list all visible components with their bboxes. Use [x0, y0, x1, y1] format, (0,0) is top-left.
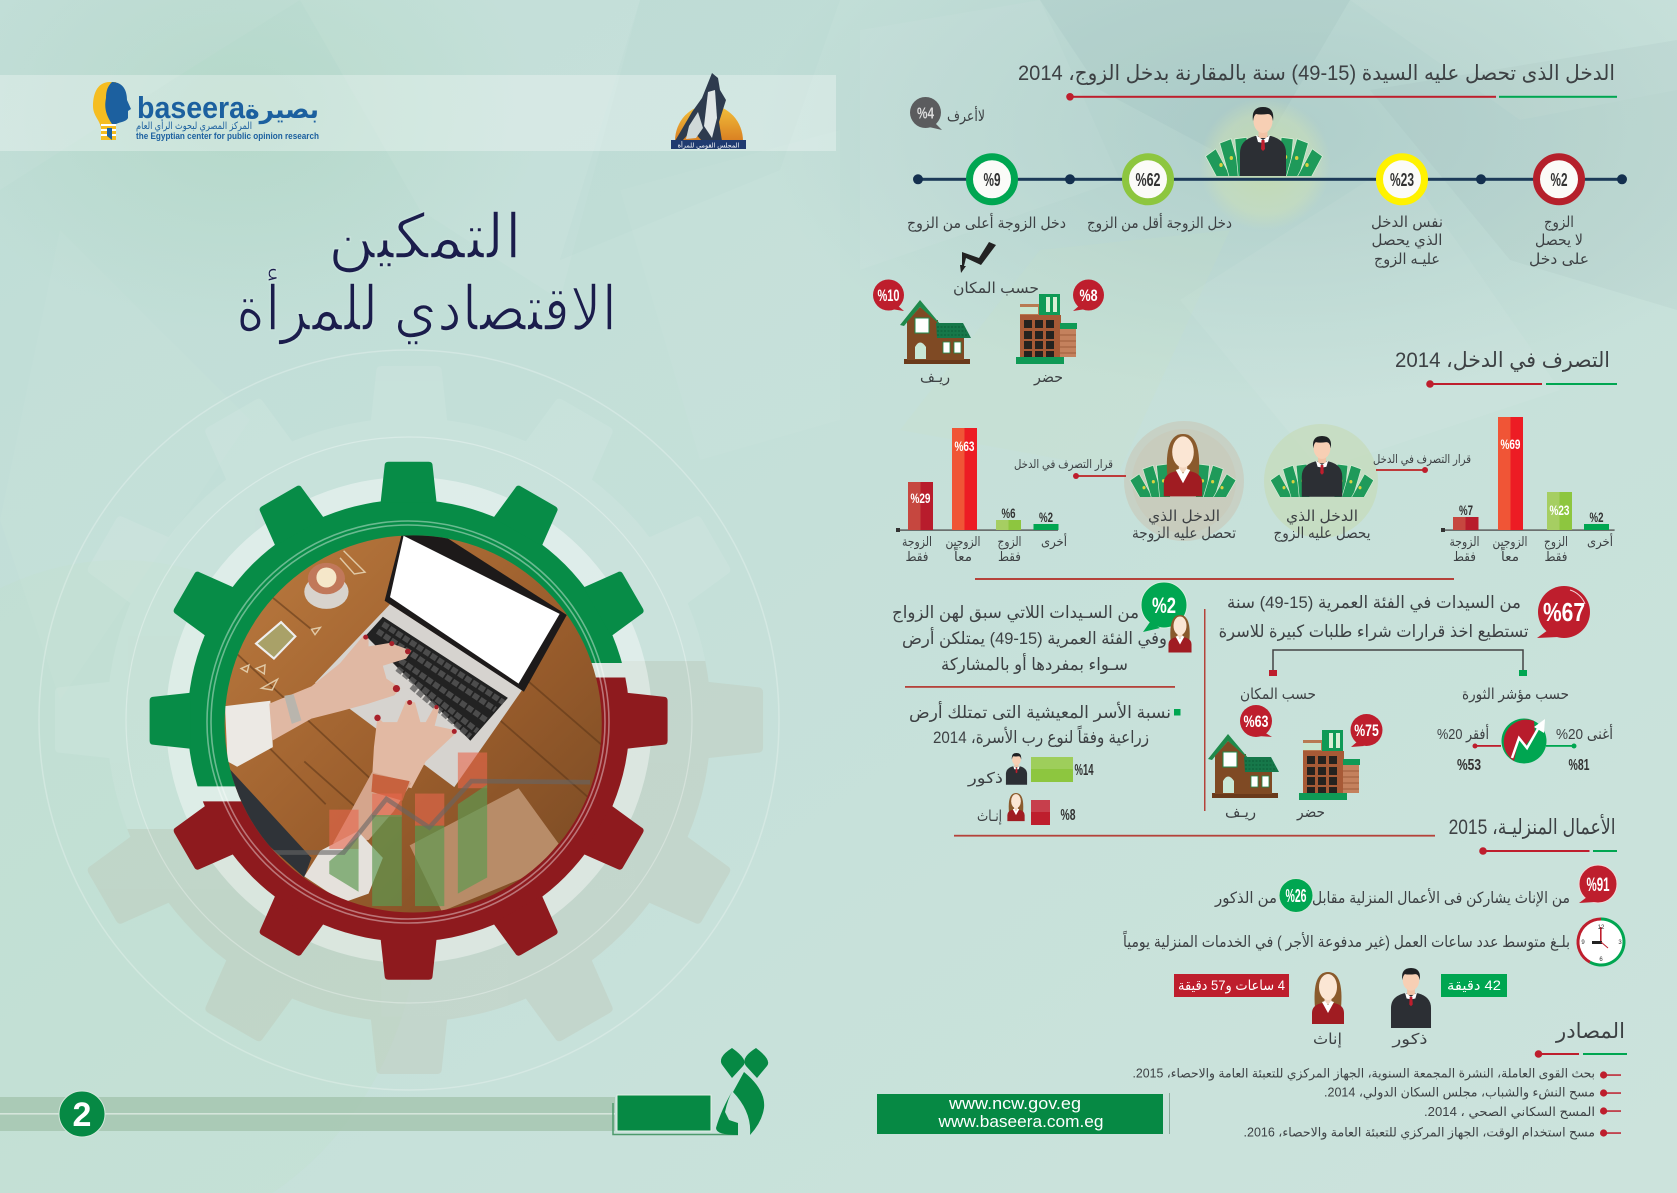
- icon: woman: [1312, 972, 1344, 1024]
- bar chart: wife income: [896, 428, 1067, 564]
- man with money: الدخل الذي: [1286, 508, 1358, 526]
- male row: %14: [1074, 762, 1094, 779]
- bullet: [1174, 709, 1180, 716]
- jeans: [229, 769, 311, 878]
- timeline labels: دخل الزوجة أعلى من الزوج: [907, 213, 1066, 233]
- page number: 2: [73, 1096, 91, 1134]
- panel: land ownership: [892, 582, 1192, 825]
- text: land ownership statement: من السـيدات اللاتي سبق لهن الزواج: [892, 603, 1139, 623]
- left hand: [225, 635, 411, 767]
- halo behind man: [1199, 98, 1331, 230]
- bubble 10%: [873, 280, 904, 311]
- bubble 63%: %63: [1244, 712, 1268, 731]
- man with money: [1264, 424, 1378, 543]
- heading: التصرف في الدخل، 2014: [1395, 349, 1610, 372]
- candle: [304, 563, 349, 609]
- bar chart: husband income: أخرى: [1587, 533, 1613, 550]
- woman with money: تحصل عليه الزوجة: [1132, 525, 1236, 542]
- callout: husband decision: [1373, 452, 1471, 473]
- man with money: يحصل عليه الزوج: [1274, 525, 1370, 543]
- right hand: [333, 700, 457, 844]
- title: [236, 203, 617, 345]
- female row: إنـاث: [977, 808, 1002, 825]
- icon: clock: 3: [1618, 940, 1622, 946]
- circle 62%: [1126, 157, 1170, 202]
- bar chart: wife income: الزوج: [998, 534, 1022, 550]
- bar chart: wife income: أخرى: [1041, 533, 1067, 550]
- heading rule: [1535, 1050, 1627, 1058]
- text: households owning land: زراعية وفقاً لنوع رب الأسرة، 2014: [933, 724, 1149, 748]
- icon: house: [900, 300, 971, 364]
- circle 23%: %23: [1390, 170, 1414, 190]
- vertical divider: [1204, 609, 1206, 811]
- footer band: [0, 1048, 768, 1137]
- timeline: [913, 157, 1627, 202]
- label: men minutes: 42 دقيقة: [1447, 977, 1501, 993]
- bar chart: husband income: %23: [1550, 502, 1570, 518]
- text: land ownership statement: سـواء بمفردها أو بالمشاركة: [941, 653, 1128, 674]
- bar chart: husband income: الزوجين: [1492, 534, 1528, 550]
- timeline labels: نفس الدخل: [1371, 214, 1443, 231]
- section: housework: [954, 814, 1624, 1048]
- sleeve: [304, 831, 383, 903]
- bubble 75%: %75: [1354, 721, 1379, 740]
- heading: الأعمال المنزليـة، 2015: [1449, 814, 1616, 839]
- text: households owning land: نسبة الأسر المعيشية التى تمتلك أرض: [909, 701, 1171, 722]
- woman with money: الدخل الذي: [1148, 508, 1220, 526]
- icon: house: [1208, 734, 1279, 798]
- bar chart: husband income: %69: [1500, 436, 1521, 452]
- circle 9%: [970, 157, 1014, 202]
- notebook: [410, 788, 559, 911]
- source list: بحث القوى العاملة، النشرة المجمعة السنوية، الجهاز المركزي للتعبئة العامة والاحصاء، 2015.: [1132, 1066, 1595, 1082]
- text: men share: من الذكور: [1214, 890, 1277, 907]
- laptop lid: [385, 531, 567, 692]
- bubble 91%: %91: [1586, 875, 1610, 896]
- timeline labels: [907, 213, 1589, 269]
- by place: حسب المكان: [1240, 686, 1316, 703]
- poorest: %53: [1457, 757, 1481, 774]
- circle 9%: %9: [984, 170, 1000, 190]
- icon: woman: [1168, 615, 1192, 652]
- callout: husband decision: قرار التصرف في الدخل: [1373, 452, 1471, 467]
- bar chart: wife income: %6: [1002, 505, 1016, 521]
- logo: national council for women: المجلس القومي للمرأة: [678, 140, 740, 150]
- green half of gear: [150, 462, 644, 786]
- bubble 67%: [1537, 586, 1590, 638]
- source list: مسح استخدام الوقت، الجهاز المركزي للتعبئة العامة والاحصاء، 2016.: [1244, 1126, 1595, 1140]
- circle 26%: %26: [1286, 886, 1306, 906]
- circle 23%: [1380, 157, 1424, 202]
- icon: clock: 9: [1581, 940, 1585, 946]
- female row: [977, 793, 1076, 825]
- richest: أغنى 20%: [1556, 724, 1613, 743]
- red half of gear: [174, 678, 668, 980]
- timeline labels: على دخل: [1529, 251, 1589, 268]
- male row: ذكور: [967, 770, 1003, 787]
- bar chart: wife income: %29: [910, 490, 931, 506]
- bar chart: wife income: معاً: [954, 547, 972, 564]
- gender labels: إناث: [1313, 1031, 1342, 1048]
- green rectangle: [613, 1095, 738, 1134]
- bar chart: husband income: [1441, 417, 1615, 564]
- callout: wife decision: قرار التصرف في الدخل: [1014, 457, 1113, 472]
- bar chart: wife income: فقط: [906, 549, 928, 564]
- icon: man with money: [1206, 107, 1322, 187]
- heading: المصادر: [1555, 1020, 1625, 1043]
- bubble 8%: %8: [1080, 286, 1098, 305]
- bar chart: wife income: %2: [1039, 509, 1053, 525]
- bar chart: wife income: فقط: [998, 549, 1021, 564]
- heading: الدخل الذى تحصل عليه السيدة (15-49) سنة بالمقارنة بدخل الزوج، 2014: [1018, 62, 1615, 86]
- bar chart: husband income: %2: [1590, 509, 1604, 525]
- gender labels: [1313, 1031, 1428, 1048]
- heading rule: [1066, 93, 1617, 101]
- icon: building: [1016, 294, 1077, 364]
- page number: [59, 1091, 105, 1137]
- rural urban labels: حضر: [1033, 369, 1063, 386]
- bubble 63%: [1240, 705, 1272, 737]
- bubble 10%: %10: [878, 286, 900, 305]
- icon: arabic letter with face: [716, 1048, 768, 1135]
- icon: wealth: [1502, 718, 1546, 764]
- bubble 91%: [1579, 865, 1617, 903]
- text: average hours: بلـغ متوسط عدد ساعات العمل (غير مدفوعة الأجر ) في الخدمات المنزلية يومياً: [1122, 931, 1570, 952]
- bracket: [1269, 650, 1527, 676]
- bubble 67%: %67: [1543, 597, 1585, 627]
- text: 67% statement: تستطيع اخذ قرارات شراء طلبات كبيرة للاسرة: [1219, 622, 1529, 642]
- icon: clock: [1578, 919, 1624, 965]
- rural urban labels: [1225, 804, 1325, 821]
- bar chart: wife income: الزوجة: [902, 534, 932, 550]
- bar chart: husband income: %7: [1459, 502, 1473, 518]
- laptop base: [315, 604, 522, 787]
- icon: building: [1299, 730, 1360, 800]
- left rule: [954, 835, 1435, 837]
- timeline labels: عليـه الزوج: [1374, 251, 1440, 269]
- timeline labels: دخل الزوجة أقل من الزوج: [1087, 213, 1232, 233]
- bubble 2%: [1141, 582, 1187, 632]
- text: land ownership statement: وفي الفئة العمرية (15-49) يمتلكن أرض: [902, 627, 1167, 649]
- bubble 75%: [1350, 714, 1382, 747]
- label: women hours: 4 ساعات و57 دقيقة: [1178, 977, 1285, 994]
- chart overlay: [253, 753, 590, 906]
- gender labels: ذكور: [1391, 1031, 1428, 1048]
- rural urban labels: ريـف: [1225, 804, 1256, 821]
- rural urban labels: ريـف: [920, 369, 950, 386]
- poorest: [1437, 724, 1501, 774]
- website box: [877, 1093, 1170, 1134]
- rural urban labels: حضر: [1296, 804, 1325, 821]
- bar chart: husband income: فقط: [1453, 549, 1476, 564]
- callout: wife decision: [1014, 457, 1126, 479]
- don't know bubble: [910, 97, 985, 130]
- bar chart: husband income: معاً: [1501, 547, 1519, 564]
- logo: baseera: بصيرة: [245, 94, 319, 125]
- divider: [975, 578, 1454, 580]
- logo: baseera: [93, 82, 319, 141]
- male row: [967, 753, 1094, 787]
- bubble 8%: [1073, 280, 1104, 311]
- section: income compared with husband: [873, 62, 1627, 386]
- richest: %81: [1568, 757, 1590, 774]
- section: income disposal: [896, 349, 1617, 580]
- by place: حسب المكان: [953, 280, 1039, 297]
- logo: national council for women: [671, 73, 746, 150]
- bar chart: husband income: الزوج: [1544, 534, 1568, 550]
- female row: %8: [1060, 807, 1076, 824]
- gear with photo: [150, 462, 668, 980]
- arrow: [960, 242, 996, 273]
- website box: www.ncw.gov.eg: [948, 1094, 1081, 1113]
- text: 67% statement: [1219, 593, 1529, 642]
- text: land ownership statement: [892, 603, 1167, 674]
- label: men minutes: [1441, 974, 1507, 997]
- bubble 2%: %2: [1152, 593, 1176, 618]
- text: 67% statement: من السيدات في الفئة العمرية (15-49) سنة: [1227, 593, 1521, 613]
- keyboard: [366, 617, 508, 741]
- photo: hands typing on laptop: [219, 529, 608, 922]
- divider: [905, 686, 1175, 688]
- timeline labels: الزوج: [1544, 214, 1574, 232]
- source list: [1132, 1066, 1621, 1140]
- icon: clock: 6: [1599, 957, 1603, 963]
- section: sources: [877, 1020, 1627, 1140]
- label: women hours: [1174, 974, 1289, 997]
- text: households owning land: [909, 701, 1171, 748]
- top logo band: [0, 73, 836, 151]
- heading rule: [1426, 380, 1617, 388]
- source list: مسح النشء والشباب، مجلس السكان الدولي، 2014.: [1324, 1086, 1595, 1100]
- logo: baseera: المركز المصري لبحوث الرأي العام: [136, 119, 252, 132]
- logo: baseera: baseera: [137, 90, 246, 125]
- bar chart: wife income: الزوجين: [946, 534, 980, 550]
- icon: man: [1391, 968, 1431, 1028]
- gold box: [256, 622, 295, 659]
- by wealth index: حسب مؤشر الثورة: [1462, 686, 1569, 703]
- poorest: أفقر 20%: [1437, 724, 1489, 743]
- bar chart: husband income: الزوجة: [1450, 534, 1480, 550]
- circle 2%: %2: [1550, 170, 1568, 190]
- title: الاقتصادي للمرأة: [236, 268, 617, 345]
- circle 26%: [1279, 878, 1313, 912]
- text: women share: من الإناث يشاركن فى الأعمال المنزلية مقابل: [1312, 888, 1570, 907]
- richest: [1546, 724, 1613, 774]
- heading rule: [1479, 847, 1617, 855]
- website box: www.baseera.com.eg: [937, 1112, 1104, 1131]
- don't know bubble: لاأعرف: [947, 106, 985, 125]
- bar chart: wife income: %63: [954, 438, 975, 454]
- rural urban labels: [920, 369, 1063, 386]
- panel: large purchases: [1204, 586, 1613, 821]
- title: التمكين: [328, 203, 522, 273]
- bar chart: husband income: فقط: [1544, 549, 1568, 564]
- circle 62%: %62: [1136, 170, 1160, 190]
- don't know bubble: %4: [917, 106, 934, 122]
- circle 2%: [1536, 157, 1582, 202]
- timeline labels: لا يحصل: [1535, 232, 1583, 249]
- timeline labels: الذي يحصل: [1372, 232, 1442, 250]
- logo: baseera: the Egyptian center for public opinion research: [136, 131, 319, 141]
- icon: clock: 12: [1598, 925, 1605, 931]
- screen: [390, 536, 560, 684]
- source list: المسح السكاني الصحي ، 2014.: [1424, 1105, 1595, 1119]
- large faded background gear: [39, 350, 779, 1090]
- woman with money: [1124, 421, 1244, 542]
